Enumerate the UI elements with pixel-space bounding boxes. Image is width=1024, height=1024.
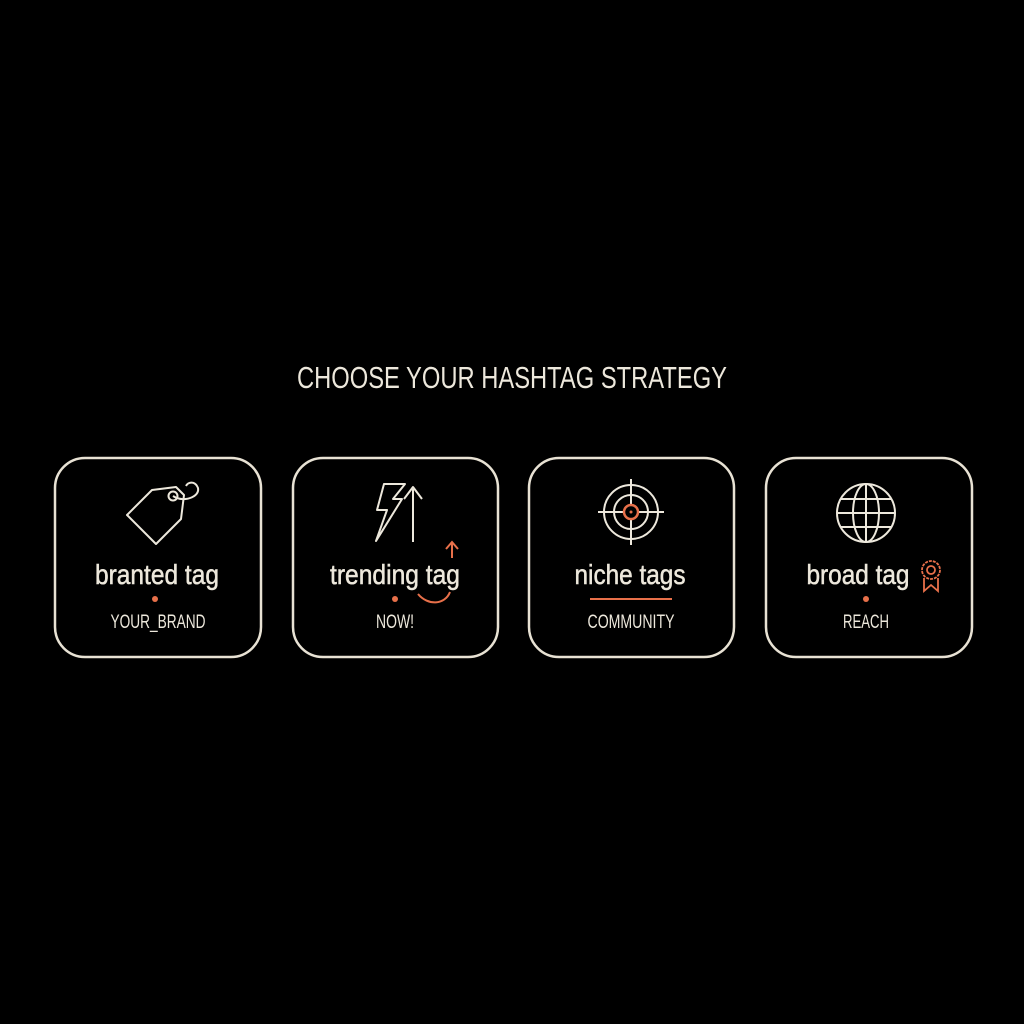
label: trending tag: trending tag (330, 559, 460, 590)
sublabel: REACH (843, 612, 889, 633)
sublabel: COMMUNITY (588, 612, 675, 633)
label: niche tags: niche tags (574, 559, 686, 590)
label: branted tag: branted tag (95, 559, 219, 590)
sublabel: YOUR_BRAND (110, 612, 206, 633)
icon: orange arrow and smile (418, 542, 458, 602)
icon: tag (127, 483, 198, 544)
icon: target (598, 479, 664, 545)
panel: branded tag (55, 458, 261, 657)
icon: lightning and arrow (376, 484, 422, 542)
icon: award ribbon (922, 561, 940, 591)
dot (152, 596, 158, 602)
label: broad tag: broad tag (806, 559, 910, 590)
panel: niche tags (529, 458, 734, 657)
panel: broad tag (766, 458, 972, 657)
icon: globe (837, 484, 895, 542)
underline (590, 598, 672, 600)
title: CHOOSE YOUR HASHTAG STRATEGY (297, 360, 727, 395)
sublabel: NOW! (376, 612, 414, 633)
panel: trending tag (293, 458, 498, 657)
